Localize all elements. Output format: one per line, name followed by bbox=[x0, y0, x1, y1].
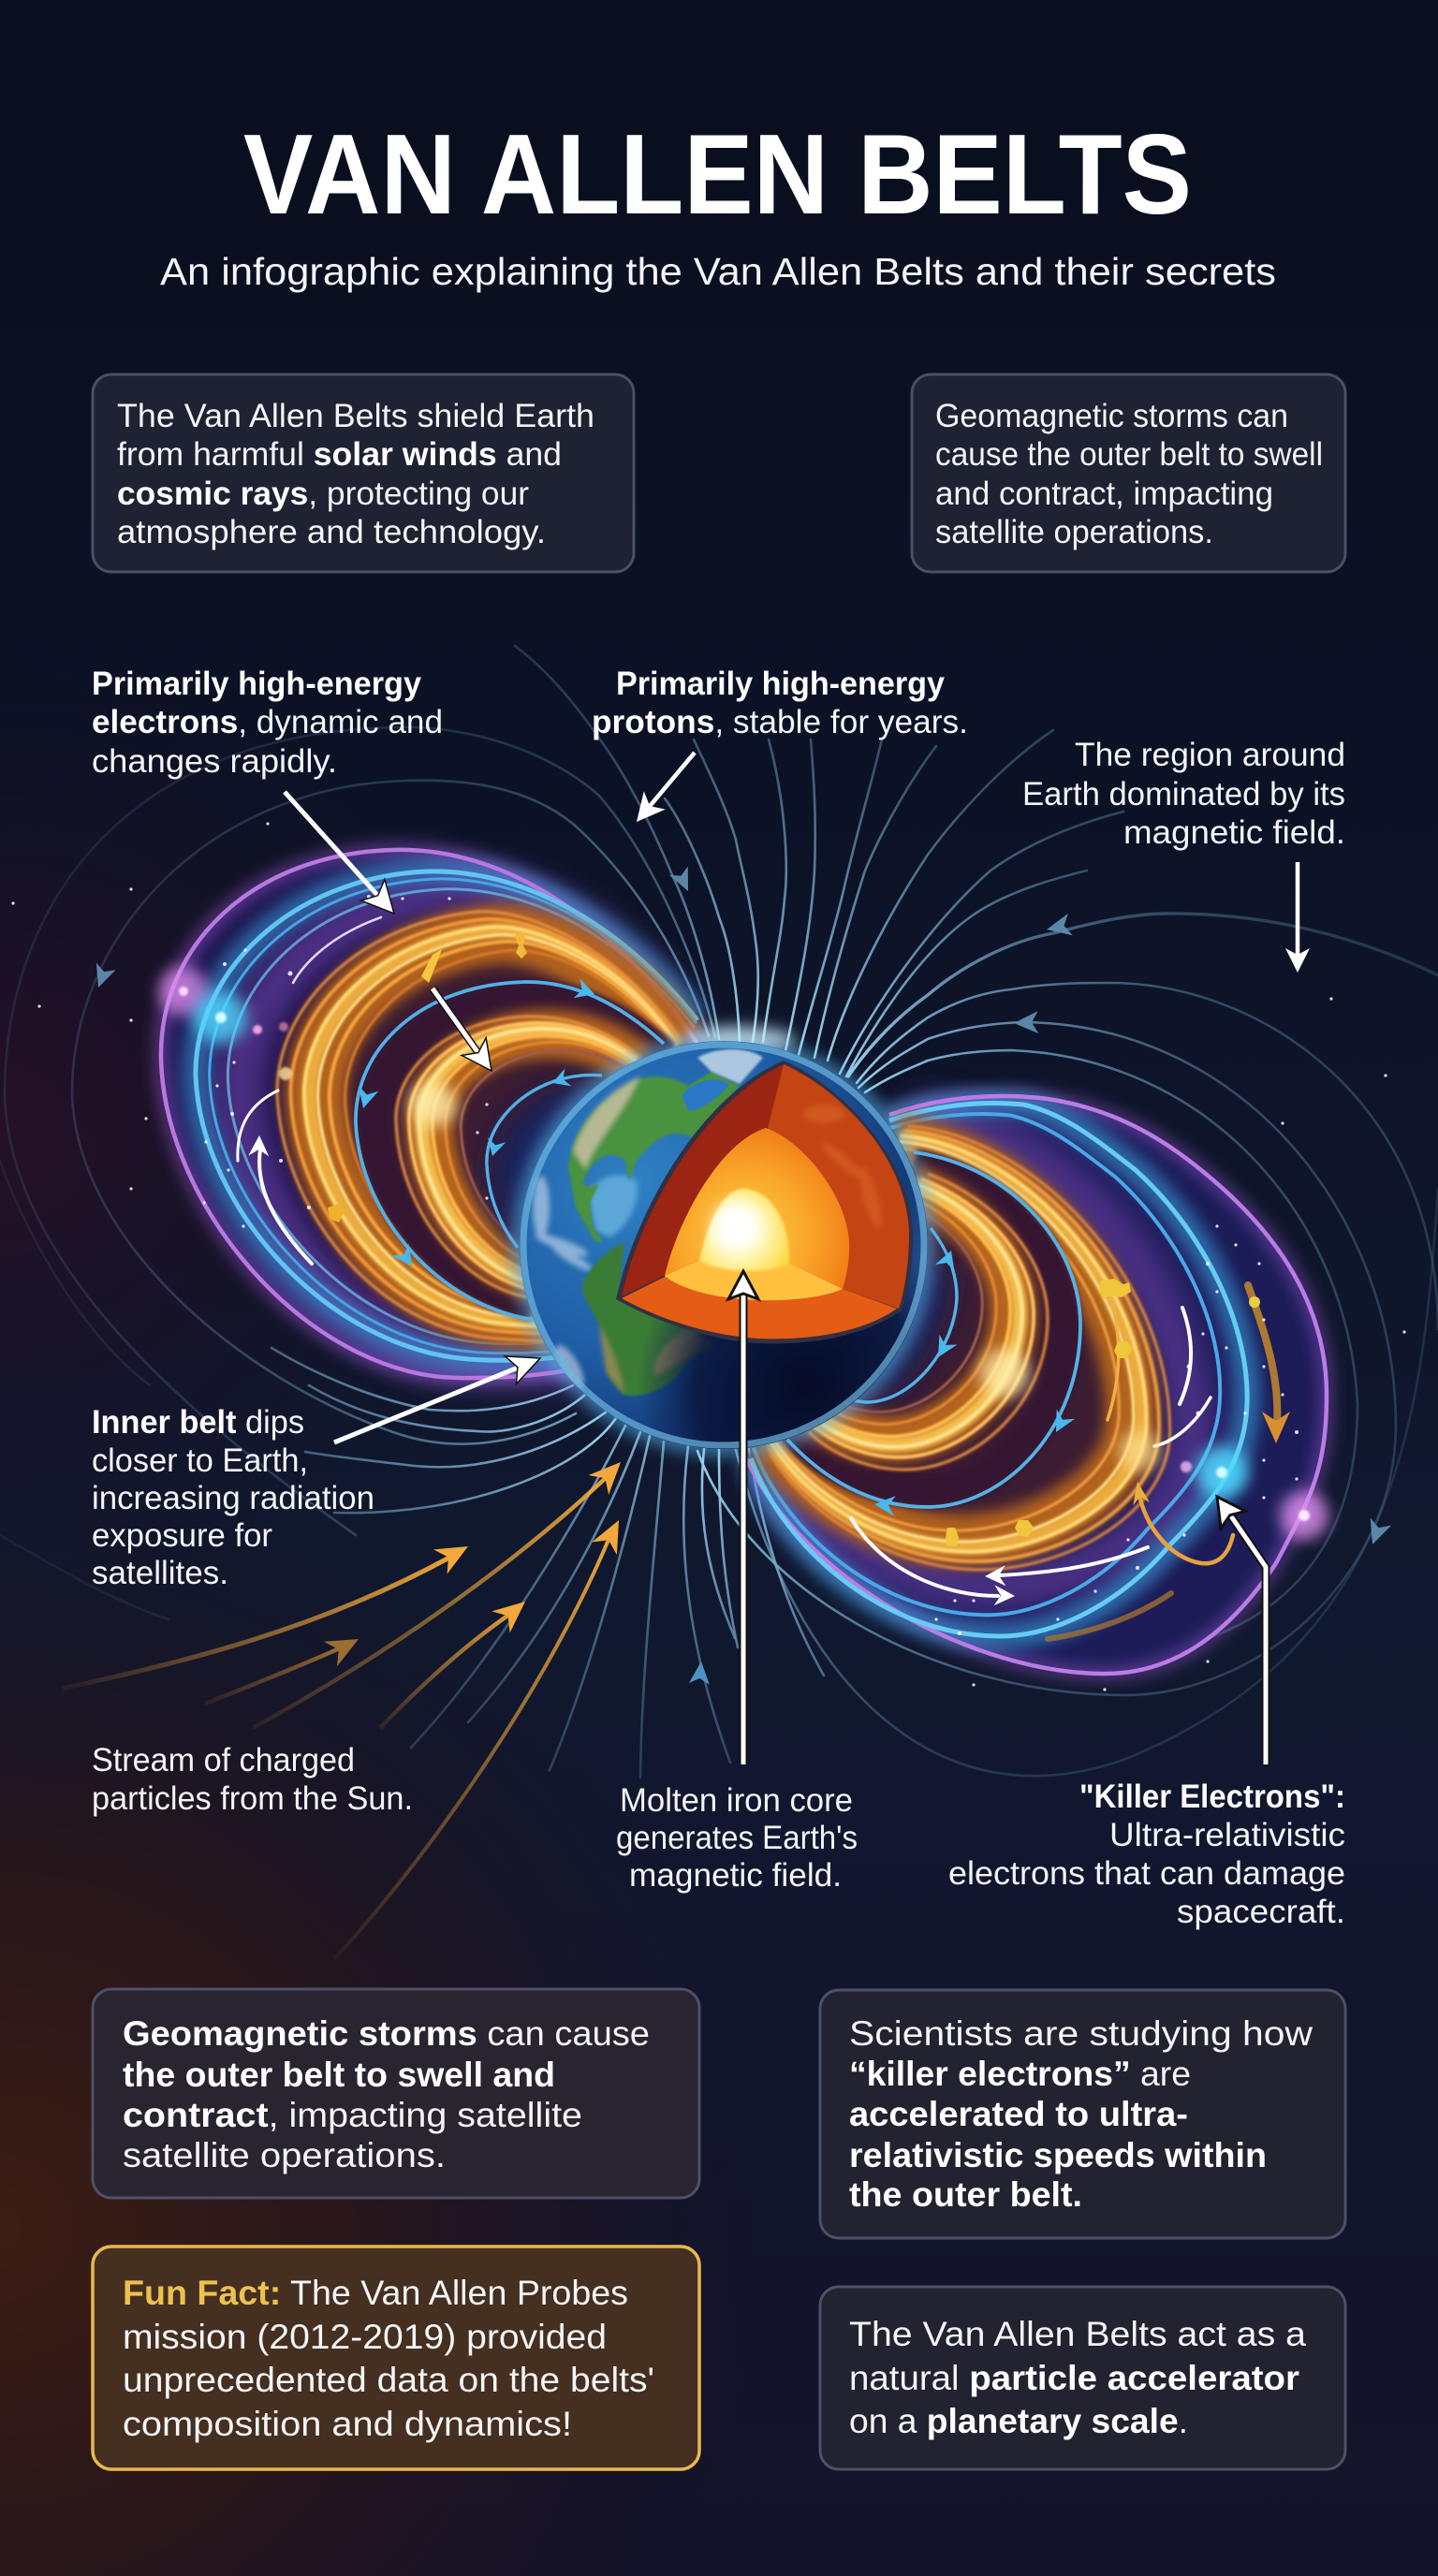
bottom mantle face bbox=[622, 1276, 897, 1339]
mantle texture bbox=[803, 1105, 887, 1231]
panel: particle accelerator: natural particle accelerator bbox=[849, 2359, 1299, 2397]
left inner orange belt bbox=[396, 1017, 640, 1306]
panel: shield info bbox=[93, 374, 634, 572]
inner core bbox=[699, 1189, 789, 1271]
right purple haze bbox=[769, 1117, 1192, 1587]
right arrowheads and gold blobs bbox=[946, 1279, 1290, 1606]
label: magnetosphere: Earth dominated by its bbox=[1022, 776, 1345, 812]
north america bbox=[568, 1072, 740, 1243]
callout arrow: magnetosphere bbox=[1285, 862, 1310, 973]
right outer orange belt bbox=[770, 1126, 1170, 1570]
magnetic field lines bbox=[0, 646, 1438, 1778]
panel: scientists: accelerated to ultra- bbox=[849, 2095, 1188, 2133]
label: inner belt protons: protons, stable for years. bbox=[592, 704, 968, 740]
panel: particle accelerator: The Van Allen Belts act as a bbox=[849, 2315, 1306, 2353]
label: killer electrons bbox=[948, 1778, 1345, 1930]
label: molten core: generates Earth's bbox=[616, 1820, 858, 1856]
right gap fill bbox=[770, 1131, 1159, 1561]
label: inner belt dips: satellites. bbox=[92, 1555, 228, 1591]
panel: geomagnetic storms bottom bbox=[93, 1989, 699, 2198]
label: molten core: Molten iron core bbox=[620, 1782, 853, 1819]
left outer belt glow bbox=[161, 850, 697, 1378]
right inner orange belt bbox=[809, 1174, 1048, 1470]
panel: scientists: relativistic speeds within bbox=[849, 2136, 1267, 2174]
left dark gap and blue flow line bbox=[356, 982, 665, 1320]
panel: shield info: atmosphere and technology. bbox=[117, 514, 546, 550]
atmosphere glow bbox=[512, 1026, 935, 1456]
label: outer belt electrons: electrons, dynamic and bbox=[92, 704, 443, 740]
left orange belt bbox=[277, 912, 678, 1341]
panel: geomagnetic storms top: cause the outer belt to swell bbox=[935, 436, 1323, 473]
south america bbox=[583, 1242, 714, 1396]
clouds bbox=[533, 1176, 594, 1393]
north america tundra bbox=[573, 1076, 640, 1170]
label: magnetosphere: magnetic field. bbox=[1123, 814, 1345, 851]
panel: fun fact: unprecedented data on the belts' bbox=[123, 2361, 654, 2399]
right particles bbox=[934, 997, 1406, 1691]
left particles bbox=[11, 822, 489, 1228]
left glowing nodes bbox=[159, 930, 527, 1222]
panel: geomagnetic storms top: satellite operations. bbox=[935, 514, 1213, 550]
radiation belts: right lobe bbox=[746, 997, 1406, 1691]
radiation belts: left lobe bbox=[11, 822, 697, 1378]
panel: geomagnetic storms bottom: Geomagnetic storms can cause bbox=[123, 2014, 650, 2053]
panel: shield info: The Van Allen Belts shield Earth bbox=[117, 398, 594, 434]
panel: fun fact: mission (2012-2019) provided bbox=[123, 2318, 607, 2356]
panel: geomagnetic storms bottom: contract , impacting satellite bbox=[123, 2096, 582, 2134]
panel: fun fact: composition and dynamics! bbox=[123, 2405, 572, 2443]
night side bbox=[642, 1267, 925, 1449]
left purple haze bbox=[239, 889, 679, 1362]
south america highlands bbox=[599, 1325, 714, 1395]
solar wind arrows bbox=[62, 1453, 631, 1959]
label: inner belt dips: Inner belt dips bbox=[92, 1404, 304, 1441]
label: killer electrons: spacecraft. bbox=[1177, 1894, 1345, 1930]
label: inner belt dips: increasing radiation bbox=[92, 1480, 374, 1516]
callout arrow: inner belt top bbox=[433, 988, 504, 1079]
label: solar wind: particles from the Sun. bbox=[92, 1780, 413, 1817]
hudson bay bbox=[682, 1079, 728, 1110]
left lobe backdrop bbox=[161, 850, 697, 1378]
right dark gap and blue flow line bbox=[787, 1152, 1080, 1507]
label: outer belt electrons bbox=[92, 666, 443, 780]
callout arrow: molten core bbox=[728, 1271, 758, 1764]
panel: particle accelerator bbox=[820, 2287, 1345, 2469]
arctic ice bbox=[697, 1049, 763, 1084]
earth with cutaway core bbox=[512, 1026, 935, 1456]
panel: shield info: cosmic rays, protecting our bbox=[117, 476, 529, 512]
panel: shield info: from harmful solar winds and bbox=[117, 436, 562, 473]
label: killer electrons: electrons that can damage bbox=[948, 1855, 1345, 1892]
panel: particle accelerator: on a planetary scale. bbox=[849, 2402, 1188, 2440]
cutaway wedge bbox=[616, 1061, 913, 1343]
left inner blue flow line bbox=[487, 1075, 609, 1254]
shallow seas bbox=[588, 1176, 638, 1237]
left mantle face bbox=[622, 1064, 784, 1296]
right glowing nodes bbox=[1181, 1446, 1328, 1540]
label: outer belt electrons: changes rapidly. bbox=[92, 743, 337, 780]
label: solar wind bbox=[92, 1742, 413, 1817]
panel: scientists bbox=[820, 1990, 1345, 2238]
right lobe backdrop bbox=[746, 1096, 1327, 1674]
right gold and white flow arrows bbox=[851, 1285, 1277, 1639]
right outer belt glow bbox=[746, 1096, 1327, 1674]
outer core floor bbox=[665, 1261, 843, 1300]
label: magnetosphere: The region around bbox=[1075, 737, 1345, 773]
right blue arrowheads bbox=[873, 1247, 1075, 1516]
label: inner belt protons bbox=[592, 666, 968, 740]
panel: geomagnetic storms top bbox=[912, 374, 1345, 572]
label: magnetosphere bbox=[1022, 737, 1345, 851]
right inner blue flow line bbox=[851, 1228, 957, 1402]
left white flow arrows bbox=[238, 917, 381, 1264]
rim light bbox=[523, 1045, 924, 1445]
label: inner belt dips: exposure for bbox=[92, 1517, 272, 1554]
panel: scientists: the outer belt. bbox=[849, 2175, 1082, 2214]
panel: geomagnetic storms bottom: the outer belt to swell and bbox=[123, 2056, 555, 2094]
panel: fun fact: Fun Fact: The Van Allen Probes bbox=[123, 2274, 628, 2312]
label: molten core: magnetic field. bbox=[629, 1857, 842, 1894]
left blue arrowheads bbox=[353, 978, 597, 1272]
panel: geomagnetic storms top: and contract, impacting bbox=[935, 476, 1273, 512]
panel: geomagnetic storms bottom: satellite operations. bbox=[123, 2136, 446, 2174]
label: outer belt electrons: Primarily high-energy bbox=[92, 666, 422, 702]
callout arrow: outer belt bbox=[285, 792, 406, 924]
field direction arrows bbox=[89, 867, 1391, 1685]
callout arrow: inner belt dip bbox=[334, 1344, 546, 1442]
panel: scientists: Scientists are studying how bbox=[849, 2014, 1313, 2053]
panel: fun fact bbox=[93, 2247, 699, 2469]
outer core bbox=[665, 1128, 849, 1300]
right mantle face bbox=[768, 1064, 909, 1309]
callout arrow: protons bbox=[626, 753, 695, 831]
label: inner belt dips: closer to Earth, bbox=[92, 1442, 308, 1479]
globe surface bbox=[520, 1041, 928, 1449]
label: inner belt dips bbox=[92, 1404, 374, 1591]
panel: scientists: “killer electrons” are bbox=[849, 2055, 1191, 2093]
panel: geomagnetic storms top: Geomagnetic storms can bbox=[935, 398, 1288, 434]
label: killer electrons: "Killer Electrons": bbox=[1079, 1778, 1345, 1815]
callout arrow: killer electrons bbox=[1205, 1488, 1266, 1764]
label: solar wind: Stream of charged bbox=[92, 1742, 355, 1778]
label: inner belt protons: Primarily high-energy bbox=[616, 666, 946, 702]
left gap fill bbox=[277, 912, 693, 1339]
subtitle: An infographic explaining the Van Allen Belts and their secrets bbox=[160, 250, 1276, 293]
label: molten core bbox=[616, 1782, 858, 1894]
title: VAN ALLEN BELTS bbox=[243, 110, 1192, 238]
label: killer electrons: Ultra-relativistic bbox=[1109, 1817, 1345, 1853]
